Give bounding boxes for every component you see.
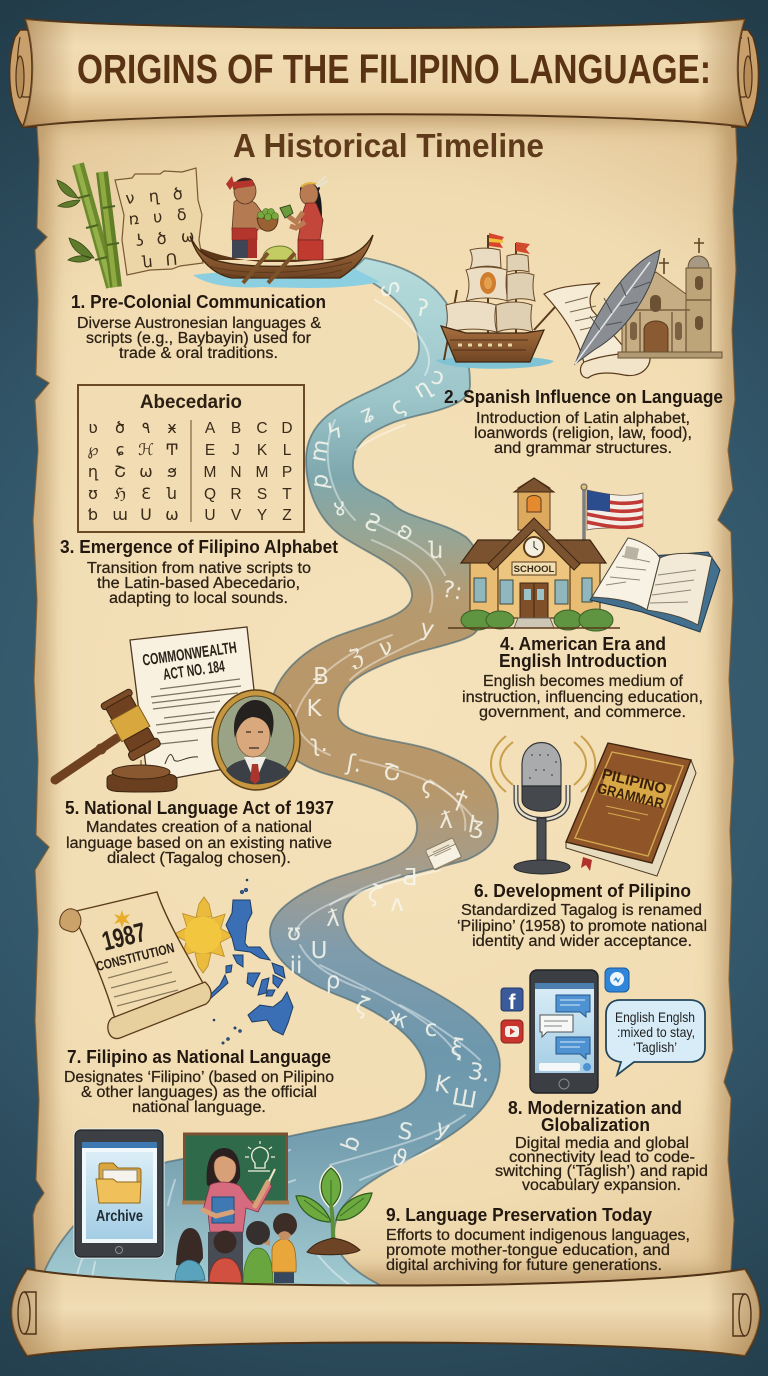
- river script glyphs: ʑ: [356, 400, 378, 429]
- description: [457, 902, 707, 950]
- icon: gavel: [55, 688, 177, 792]
- river script glyphs: ʚ: [392, 517, 419, 547]
- description: [87, 560, 311, 607]
- chart: abecedario table: ʊ: [88, 484, 98, 503]
- banner body: [23, 19, 747, 127]
- chart: abecedario table: ɯ: [112, 505, 128, 524]
- panel: step 4 american era: [448, 478, 720, 721]
- chart: abecedario table: A: [205, 420, 216, 437]
- description: trade & oral traditions.: [119, 345, 278, 362]
- chart: abecedario table: M: [256, 464, 268, 481]
- panel: step 7 filipino as national language: [60, 879, 334, 1116]
- river script glyphs: ς: [386, 392, 411, 422]
- icon: facebook: [501, 988, 523, 1014]
- callout: taglish speech bubble: :mixed to stay,: [617, 1024, 695, 1040]
- panel: step 8 modernization: [495, 968, 708, 1194]
- description: loanwords (religion, law, food),: [474, 425, 692, 442]
- scroll roll left: [10, 30, 43, 127]
- icon: manuscript scroll: [544, 283, 650, 378]
- river script glyphs: Շ: [383, 760, 401, 786]
- river script glyphs: ʅ.: [310, 731, 328, 757]
- description: adapting to local sounds.: [109, 590, 288, 607]
- heading: 1. Pre-Colonial Communication: [71, 292, 326, 312]
- chart: abecedario table: Ͳ: [165, 440, 179, 459]
- chart: abecedario table: T: [282, 486, 292, 503]
- river script glyphs: S: [396, 1118, 415, 1146]
- chart: abecedario table: C: [256, 420, 268, 437]
- river script glyphs: Ƌ: [401, 865, 417, 891]
- icon: trading figures: [226, 176, 328, 260]
- chart: abecedario table: Q: [204, 486, 216, 503]
- description: connectivity lead to code-: [509, 1149, 695, 1166]
- river script glyphs: ж: [383, 1003, 412, 1034]
- chart: abecedario table: J: [232, 442, 240, 459]
- icon: commonwealth act document: ACT NO. 184: [162, 658, 226, 684]
- heading: Globalization: [541, 1115, 650, 1135]
- icon: schoolhouse: [448, 478, 620, 631]
- icon: pilipino grammar book: GRAMMAR: [595, 781, 666, 813]
- icon: children group: [175, 1213, 297, 1284]
- icon: baybayin paper: [115, 168, 203, 275]
- icon: small book on river: [425, 838, 462, 870]
- river script glyphs: b: [337, 1132, 366, 1155]
- river script glyphs: d: [308, 472, 336, 491]
- icon: baybayin paper: Ո: [165, 250, 178, 270]
- description: scripts (e.g., Baybayin) used for: [86, 330, 311, 347]
- river script glyphs: ξ: [449, 1034, 466, 1062]
- heading: 8. Modernization and: [508, 1098, 682, 1118]
- river script glyphs: m: [305, 437, 335, 464]
- icon: produce basket: [257, 208, 296, 260]
- heading: 3. Emergence of Filipino Alphabet: [60, 537, 338, 557]
- icon: chalkboard: [182, 1134, 289, 1202]
- icon: schoolhouse: SCHOOL: [514, 564, 555, 575]
- chart: abecedario table: Abecedario: [140, 392, 242, 413]
- description: Digital media and global: [515, 1135, 689, 1152]
- river script glyphs: ℨ: [346, 644, 366, 673]
- bottom scroll banner: [11, 1269, 760, 1356]
- river script glyphs: ʊ: [287, 920, 301, 946]
- icon: facebook: f: [508, 991, 516, 1014]
- chart: abecedario table: U: [204, 507, 216, 524]
- top scroll banner: [10, 19, 759, 127]
- description: [474, 410, 692, 457]
- chart: abecedario table: E: [205, 442, 215, 459]
- heading: 2. Spanish Influence on Language: [444, 387, 723, 407]
- description: English becomes medium of: [483, 673, 684, 690]
- river script glyphs: c: [425, 1016, 437, 1042]
- river script glyphs: ४: [332, 495, 348, 523]
- chart: abecedario table: ℌ: [114, 484, 126, 503]
- icon: baybayin paper: ն: [141, 252, 153, 272]
- chart: abecedario table: ω: [139, 462, 153, 481]
- icon: baybayin paper: υ: [152, 207, 163, 227]
- icon: 1987 constitution scroll: [60, 892, 211, 1039]
- icon: water under boat: [193, 268, 380, 288]
- river script glyphs: ɔ: [428, 363, 447, 391]
- chart: abecedario table: D: [281, 420, 293, 437]
- description: digital archiving for future generations.: [386, 1257, 662, 1274]
- description: dialect (Tagalog chosen).: [107, 850, 291, 867]
- icon: 1987 constitution scroll: 1987: [99, 917, 149, 957]
- description: government, and commerce.: [479, 704, 686, 721]
- river script glyphs: ν: [377, 634, 394, 662]
- callout: taglish speech bubble: ‘Taglish’: [633, 1039, 677, 1055]
- icon: american flag: [581, 484, 643, 627]
- description: [462, 673, 703, 721]
- river script glyphs: ς: [418, 772, 439, 801]
- icon: stone church: [618, 238, 722, 358]
- description: the Latin-based Abecedario,: [97, 575, 300, 592]
- icon: teacher: [203, 1148, 275, 1282]
- icon: commonwealth act document: [130, 627, 262, 783]
- scroll roll right: [732, 30, 759, 127]
- description: Introduction of Latin alphabet,: [476, 410, 690, 427]
- heading: 6. Development of Pilipino: [474, 881, 691, 901]
- icon: archive tablet: [74, 1128, 164, 1258]
- icon: wooden boat: [190, 235, 373, 283]
- panel: step 5 national language act: [55, 627, 334, 867]
- description: [386, 1227, 690, 1274]
- panel: step 3 filipino alphabet: [60, 385, 338, 607]
- icon: commonwealth act document: COMMONWEALTH: [141, 639, 238, 670]
- chart: abecedario table: N: [230, 464, 242, 481]
- description: [77, 315, 322, 362]
- river script glyphs: y: [433, 1115, 453, 1144]
- panel: parchment: [33, 110, 737, 1285]
- description: Mandates creation of a national: [86, 819, 312, 836]
- river script glyphs: ρ: [326, 968, 340, 994]
- chart: abecedario table: M: [204, 464, 216, 481]
- panel: step 2 spanish influence: [436, 233, 723, 457]
- icon: sun: [174, 897, 234, 973]
- river script glyphs: ն: [428, 538, 443, 564]
- chart: abecedario table: ϧ: [167, 462, 177, 481]
- river script glyphs: ƛ: [439, 808, 453, 834]
- description: [66, 819, 332, 867]
- icon: bamboo: [57, 164, 119, 287]
- icon: baybayin paper: δ: [176, 205, 187, 224]
- river script glyphs: [287, 272, 492, 1173]
- river script glyphs: ?:: [440, 577, 464, 606]
- icon: baybayin paper: ղ: [148, 186, 161, 206]
- chart: abecedario table: Y: [257, 507, 267, 524]
- icon: messenger: [605, 968, 629, 992]
- icon: 1987 constitution scroll: CONSTITUTION: [95, 940, 176, 974]
- chart: abecedario table: ٩: [142, 418, 150, 437]
- chart: abecedario table: [78, 385, 304, 532]
- heading: 9. Language Preservation Today: [386, 1205, 652, 1225]
- description: and grammar structures.: [494, 440, 672, 457]
- river script glyphs: ʔ: [414, 295, 430, 323]
- icon: baybayin paper: ռ: [128, 209, 140, 229]
- river script glyphs: ϯ: [450, 785, 471, 814]
- river script glyphs: ϑ: [388, 1144, 411, 1173]
- chart: abecedario table: ծ: [115, 418, 125, 437]
- chart: abecedario table: ℘: [87, 440, 99, 459]
- description: Transition from native scripts to: [87, 560, 311, 577]
- description: Designates ‘Filipino’ (based on Pilipino: [64, 1069, 334, 1086]
- icon: pilipino grammar book: PILIPINO: [600, 766, 668, 798]
- river timeline path: [45, 258, 500, 1290]
- river script glyphs: U: [311, 938, 327, 964]
- river script glyphs: ζ: [364, 880, 385, 909]
- description: [495, 1135, 708, 1194]
- river script glyphs: ƛ: [326, 906, 340, 932]
- river script glyphs: ζ: [352, 992, 373, 1021]
- chart: abecedario table: S: [257, 486, 267, 503]
- chart: abecedario table: V: [231, 507, 242, 524]
- description: promote mother-tongue education, and: [386, 1242, 670, 1259]
- icon: philippine map: [208, 879, 293, 1044]
- subtitle: A Historical Timeline: [233, 127, 544, 164]
- river script glyphs: ղ: [410, 373, 437, 404]
- river script glyphs: ʌ: [390, 891, 404, 917]
- icon: pilipino grammar book: [566, 743, 696, 876]
- icon: baybayin paper: ծ: [156, 229, 167, 248]
- river script glyphs: Ƀ: [313, 664, 329, 690]
- description: national language.: [132, 1099, 266, 1116]
- callout: taglish speech bubble: [606, 1000, 705, 1075]
- heading: [508, 1098, 682, 1135]
- description: Diverse Austronesian languages &: [77, 315, 322, 332]
- icon: quill feather: [575, 250, 660, 364]
- banner body: [11, 1269, 760, 1356]
- river script glyphs: K: [433, 1071, 453, 1099]
- heading: English Introduction: [499, 651, 667, 671]
- scroll roll left: [18, 1292, 36, 1334]
- river script glyphs: y: [418, 615, 436, 643]
- chart: abecedario table: ɕ: [116, 440, 124, 459]
- chart: abecedario table: Ս: [140, 505, 152, 524]
- chart: abecedario table: ℋ: [138, 440, 154, 459]
- heading: [499, 634, 667, 671]
- chart: abecedario table: Շ: [114, 462, 126, 481]
- description: vocabulary expansion.: [522, 1177, 681, 1194]
- heading: 7. Filipino as National Language: [67, 1047, 331, 1067]
- heading: 5. National Language Act of 1937: [65, 798, 334, 818]
- chart: abecedario table: P: [282, 464, 292, 481]
- river script glyphs: Ƨ: [361, 509, 384, 538]
- description: language based on an existing native: [66, 835, 332, 852]
- river script glyphs: ʃ.: [344, 750, 364, 778]
- icon: baybayin paper: ω: [180, 226, 195, 246]
- callout: taglish speech bubble: English Englsh: [615, 1009, 695, 1025]
- panel: step 1 pre-colonial communication: [57, 164, 380, 362]
- icon: archive tablet: Archive: [96, 1208, 143, 1225]
- chart: abecedario table: ʋ: [88, 418, 98, 437]
- chart: abecedario table: ƅ: [88, 505, 98, 524]
- panel: step 6 development of pilipino: [457, 736, 707, 950]
- description: ‘Pilipino’ (1958) to promote national: [457, 918, 707, 935]
- river script glyphs: ϟ: [323, 417, 347, 447]
- chart: abecedario table: R: [230, 486, 242, 503]
- chart: abecedario table: ӿ: [167, 418, 177, 437]
- panel: step 9 language preservation: [74, 1128, 690, 1284]
- chart: abecedario table: L: [283, 442, 292, 459]
- icon: open book: [590, 538, 720, 632]
- icon: galleon ship: [436, 233, 566, 369]
- chart: abecedario table: Z: [282, 507, 292, 524]
- icon: portrait medallion: [212, 690, 300, 790]
- river script glyphs: ɮ: [466, 812, 486, 840]
- icon: baybayin paper: ծ: [172, 184, 184, 204]
- icon: microphone: [491, 736, 595, 874]
- description: instruction, influencing education,: [462, 689, 703, 706]
- river script glyphs: K: [306, 696, 322, 722]
- description: Standardized Tagalog is renamed: [461, 902, 702, 919]
- description: & other languages) as the official: [81, 1084, 317, 1101]
- icon: smartphone: [530, 970, 598, 1093]
- description: identity and wider acceptance.: [472, 933, 692, 950]
- description: Efforts to document indigenous languages,: [386, 1227, 690, 1244]
- chart: abecedario table: B: [231, 420, 241, 437]
- icon: baybayin paper: ν: [125, 188, 135, 208]
- heading: 4. American Era and: [500, 634, 666, 654]
- icon: seedling: [296, 1168, 372, 1255]
- description: switching (‘Taglish’) and rapid: [495, 1163, 708, 1180]
- chart: abecedario table: ղ: [88, 462, 99, 481]
- chart: abecedario table: Ɛ: [141, 484, 151, 503]
- river script glyphs: Ш: [450, 1084, 479, 1114]
- chart: abecedario table: K: [257, 442, 268, 459]
- scroll roll right: [733, 1294, 751, 1336]
- description: [64, 1069, 334, 1116]
- river script glyphs: 3.: [466, 1058, 492, 1088]
- icon: baybayin paper: ʖ: [135, 231, 145, 250]
- chart: abecedario table: ն: [166, 484, 177, 503]
- river script glyphs: ii: [290, 953, 302, 979]
- river script glyphs: ᔕ: [376, 272, 404, 303]
- chart: abecedario table: ω: [165, 505, 179, 524]
- icon: youtube: [501, 1020, 523, 1043]
